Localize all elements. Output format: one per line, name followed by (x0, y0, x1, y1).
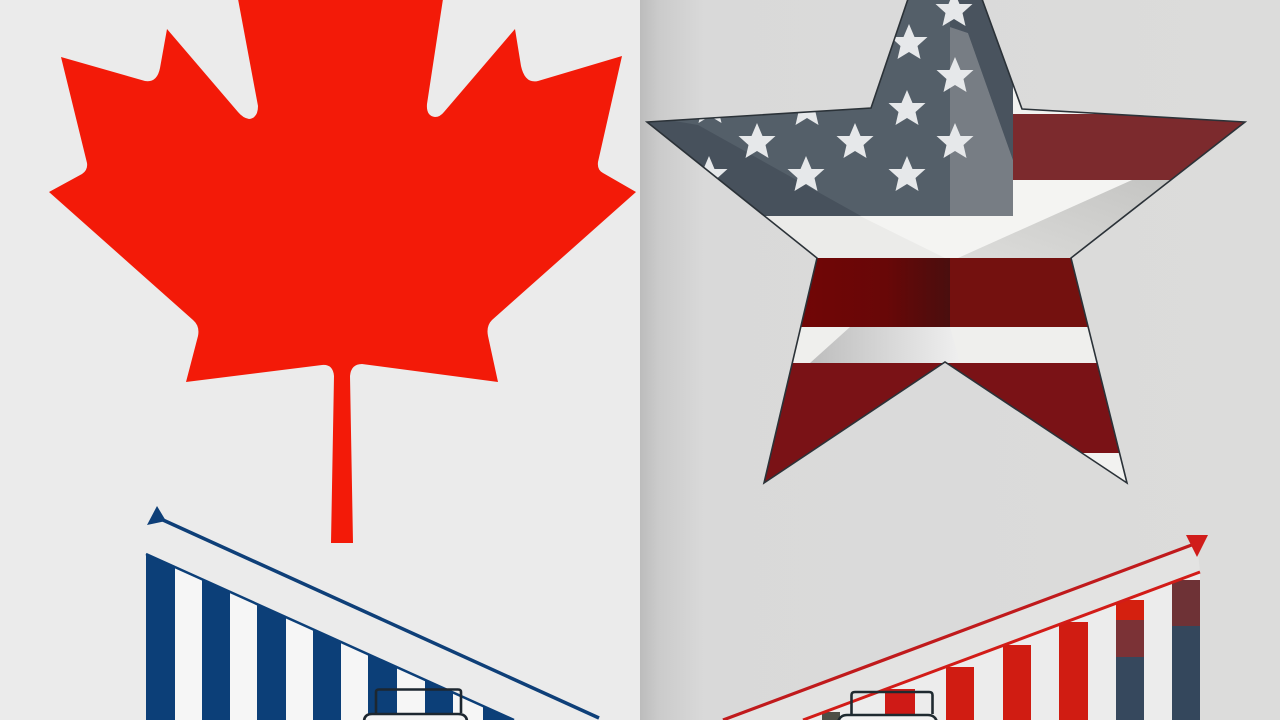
bar chart stripes (146, 555, 511, 720)
arrow: falling trend (147, 506, 599, 718)
band between trend lines (723, 543, 1200, 720)
bar chart stripes (808, 574, 1200, 720)
panel: Canada background (0, 0, 640, 720)
white stripe fold shading (765, 180, 1175, 363)
panel: United States background (640, 0, 1280, 720)
icon: package outline left (364, 690, 467, 720)
icon: red maple leaf (49, 0, 636, 543)
bar chart: falling blue bars (146, 506, 599, 720)
flag canton (640, 0, 1013, 216)
arrow: rising trend (723, 535, 1208, 720)
canton stars (690, 0, 974, 191)
bar chart: rising red bars (723, 535, 1208, 720)
star outline (647, 0, 1245, 483)
flag stripes (765, 87, 1244, 482)
icon: star with United States flag pattern (640, 0, 1260, 485)
icon: package outline right (838, 692, 937, 720)
trend line under bars (146, 554, 514, 720)
trend line above bars (803, 572, 1200, 720)
